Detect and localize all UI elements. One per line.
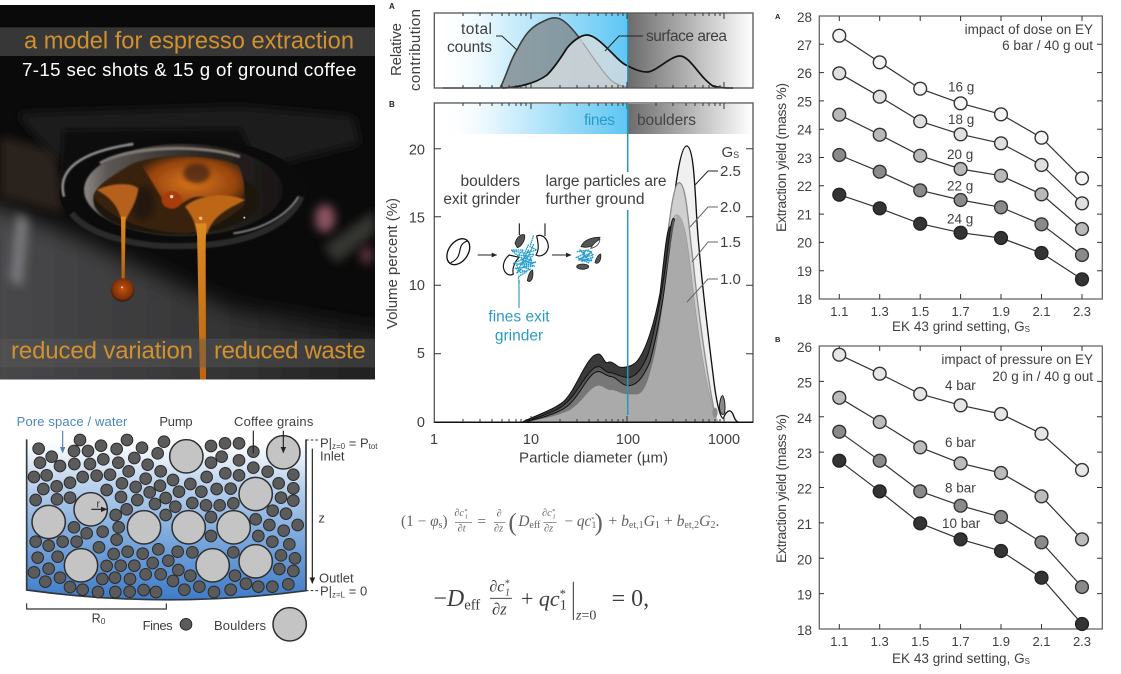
equation: mass balance: G [699,513,710,530]
inset: grinding schematic [442,223,601,308]
water-filled basket [27,439,306,600]
heading: a model for espresso extraction: a model for espresso extraction [24,29,354,55]
equation: mass balance: et,2 [684,520,699,531]
equation: mass balance: ∂z [494,523,503,534]
y axis labels: 20 [797,236,812,250]
curve leaders [687,171,718,302]
y axis labels: 22 [797,482,812,496]
label: outlet: Outlet [319,570,354,585]
y axis labels: 21 [797,208,812,222]
x axis labels [830,304,1091,319]
y axis labels: 21 [797,517,812,532]
equation: mass balance [401,508,719,537]
fines/boulders divider A [627,13,629,88]
y axis labels [797,10,812,307]
label: inlet pressure: = P [345,435,369,450]
curve labels [720,163,741,288]
band: fines to boulders: boulders [637,112,696,129]
series: 6 bar: 6 bar [945,435,976,450]
annotation: 20 g in / 40 g out [992,369,1093,384]
axis title: relative contribution: contribution [407,9,424,91]
x axis labels: 1.3 [871,304,889,319]
equation: mass balance: 2 [710,520,715,531]
x axis labels: 2.3 [1073,304,1091,319]
label: outlet pressure: = 0 [345,584,367,599]
icon: whole coffee bean [442,234,474,269]
series: 8 bar: 8 bar [945,481,976,496]
equation: mass balance: ∂c [454,508,464,519]
annotation [965,22,1093,53]
equation: mass balance: ∂ [497,509,502,520]
series: 22 g [833,149,1088,261]
equation: mass balance: 1 [655,520,660,531]
series: 4 bar [833,348,1088,476]
series: 6 bar [833,391,1088,546]
y axis labels [409,143,425,431]
panel letter B: B [389,100,395,109]
equation: mass balance: ( [508,509,517,537]
equation: inlet boundary condition: 1 [505,587,510,598]
x axis labels: 1.7 [952,634,970,649]
series: 16 g [833,29,1088,185]
y axis labels: 18 [797,292,812,307]
equation: mass balance: + b [608,513,629,530]
equation: mass balance: s [439,520,443,531]
y axis labels: 27 [797,38,812,53]
label: coffee grains: Coffee grains [234,414,314,429]
annotation: large particles further ground: large particles are [546,173,666,190]
y axis labels: 23 [797,151,812,166]
annotation: boulders exit grinder: exit grinder [443,191,520,208]
equation: mass balance: ) [594,509,603,537]
y axis labels: 20 [409,143,425,159]
series: 8 bar [833,425,1088,593]
legend: boulders [214,608,306,641]
equation: mass balance: 1 [592,521,597,531]
panel letter A: A [389,2,395,11]
x axis labels: 2.3 [1073,634,1091,649]
chart: relative contribution (panel A, middle) [388,2,753,91]
y axis title: Extraction yield (mass %) [773,414,789,563]
axis title: particle diameter: Particle diameter (µm) [519,450,668,467]
legend: fines: Fines [143,618,173,633]
axis title: relative contribution: Relative [388,23,405,76]
leader: total counts [496,36,517,50]
curve: total counts [443,18,627,88]
equation: inlet boundary condition: ∂z [492,599,507,618]
label: total counts: counts [447,39,492,56]
x axis labels: 1.9 [992,304,1010,319]
ticks [819,16,1102,299]
label: inlet pressure: tot [369,442,378,451]
x axis labels [430,432,740,448]
equation: inlet boundary condition: ∂c [489,579,504,596]
panel: coffee puck diagram [17,414,378,641]
equation: mass balance: ) [442,513,448,530]
x axis labels: 2.1 [1032,304,1051,319]
y axis title: Extraction yield (mass %) [773,83,789,232]
x axis labels: 1.5 [911,304,929,319]
subheading: shots and dose: 7-15 sec shots & 15 g of ground coffee [22,59,356,80]
icon: bean fragments and boulders [503,235,601,282]
panel: espresso photo with title overlays [0,5,375,380]
distribution curves [522,146,740,422]
equation: inlet boundary condition: 1 [560,597,567,613]
label: pore space / water: Pore space / water [17,414,128,429]
series: 24 g: 24 g [947,211,973,226]
y axis labels: 15 [409,211,425,227]
y axis labels: 28 [797,10,812,25]
boulder particles [32,436,300,582]
chart: impact of pressure on extraction yield [773,335,1102,666]
x axis labels: 10 [523,432,539,448]
label: surface area: surface area [646,28,727,45]
equation: mass balance: eff [529,520,541,531]
x axis labels: 1.7 [952,304,970,319]
y axis labels: 19 [797,264,812,279]
y axis labels: 25 [797,375,812,390]
x axis title: EK 43 grind setting, G [892,651,1025,666]
equation: inlet boundary condition: z=0 [575,608,596,623]
equation: mass balance: . [715,513,719,530]
equation: inlet boundary condition: * [560,587,566,601]
x axis labels: 1.3 [871,634,889,649]
equation: inlet boundary condition: −D [433,586,464,612]
equation: mass balance: G [644,513,655,530]
x axis title: S [1025,325,1030,334]
label: r: r [96,498,100,510]
x axis labels: 1.1 [830,304,848,319]
x axis title: EK 43 grind setting, G [892,319,1025,334]
panel letter: A [775,12,781,21]
curve labels: 2.0 [720,199,741,216]
fine particles [28,434,303,598]
label: z: z [318,510,325,525]
series: 4 bar: 4 bar [945,378,976,393]
annotation: large particles further ground: further ground [546,191,644,208]
curve labels: 1.5 [720,234,741,251]
label: pump: Pump [159,414,193,429]
annotation: large particles further ground [546,173,666,208]
x axis labels [830,634,1091,649]
band: fines to boulders: fines [584,112,615,129]
x axis labels: 1 [430,432,438,448]
legend: fines [143,618,192,633]
series: 16 g: 16 g [948,80,974,95]
arrow: pore space [61,431,64,453]
equation: mass balance: et,1 [629,520,644,531]
equation: inlet boundary condition: eff [464,597,480,613]
label: outlet pressure: z=L [332,590,346,599]
y axis labels [797,340,812,638]
y axis labels: 24 [797,122,812,138]
y axis labels: 24 [797,411,812,426]
y axis labels: 18 [797,623,812,638]
equation: mass balance: ∂c [542,508,552,519]
y axis labels: 26 [797,66,812,81]
curve labels: 2.5 [720,163,741,180]
divider: fines/boulders at 100 micrometres [627,103,629,415]
equation: mass balance: b [677,513,685,530]
frame [819,16,1102,299]
curve labels: 1.0 [720,271,741,288]
equation: mass balance: ∂t [458,523,467,534]
label: R0: R [92,612,101,626]
frame [819,346,1102,629]
y axis labels: 20 [797,552,812,567]
equation: mass balance: ∂z [544,523,553,534]
callout: reduced waste: reduced waste [214,337,366,364]
legend title: Gs: S [733,150,739,160]
equation: mass balance: = [477,514,486,531]
label: total counts [447,21,492,56]
series: 24 g [833,188,1088,286]
arrow: z axis [311,449,314,583]
x axis labels: 100 [616,432,640,448]
frame A [434,13,753,88]
ticks [819,346,1102,629]
y axis labels: 23 [797,446,812,461]
axis baseline and frame B [434,103,753,422]
chart: impact of dose on extraction yield [773,10,1102,334]
series: 20 g [833,108,1088,235]
x axis labels: 1000 [708,432,740,448]
callout: reduced variation: reduced variation [11,337,193,364]
y axis labels: 10 [409,278,425,294]
annotation: impact of dose on EY [965,22,1093,37]
x axis labels: 1.5 [911,634,929,649]
icon: fines cloud [512,236,593,284]
equation: mass balance: * [552,508,556,515]
series: 10 bar [833,454,1088,630]
label: inlet: Inlet [320,449,345,464]
axis title: relative contribution [388,9,424,91]
ticks A [463,13,724,88]
label: inlet pressure: z=0 [332,442,346,451]
equation: mass balance: 1 [465,513,468,520]
x axis title: S [1025,657,1030,666]
curve: surface area [502,35,628,88]
arrows: coffee grains [253,431,283,453]
legend: boulders: Boulders [214,618,266,633]
x axis labels: 2.1 [1032,634,1051,649]
series: 18 g: 18 g [948,112,974,127]
arrow: bean to grinder [478,253,497,256]
label: R0: 0 [101,616,106,626]
annotation: boulders exit grinder [443,173,520,208]
y axis labels: 5 [417,346,425,362]
legend title: Gs: G [722,144,733,161]
pressure markers [306,440,319,591]
equation: inlet boundary condition: + qc [521,586,560,611]
annotation: impact of pressure on EY [941,352,1093,367]
equation: mass balance: * [464,508,468,515]
equation: mass balance: * [591,516,595,523]
label: total counts: total [461,21,492,38]
equation: mass balance: 1 [552,513,556,520]
band: fines to boulders [440,104,752,134]
x axis labels: 1.1 [830,634,848,649]
y axis labels: 22 [797,179,812,194]
equation: mass balance: − qc [564,513,591,530]
annotation: boulders exit grinder: boulders [461,173,520,190]
series: 22 g: 22 g [947,179,973,194]
chart: particle size distribution (panel B, middle) [384,100,753,467]
equation: mass balance: (1 − φ [401,513,439,530]
series: 10 bar: 10 bar [942,516,981,531]
annotation: fines exit grinder [488,309,550,345]
bracket: R0 [27,603,166,609]
label: outlet pressure: P| [320,584,332,599]
equation: inlet boundary condition [433,579,649,623]
annotation: fines exit grinder: grinder [495,328,543,345]
panel letter: B [775,335,781,344]
series: 20 g: 20 g [947,147,973,162]
equation: inlet boundary condition: = 0, [612,586,649,612]
annotation: fines exit grinder: fines exit [488,309,550,326]
arrow: grinder to output [552,253,571,256]
equation: inlet boundary condition: * [504,579,509,590]
y axis labels: 0 [417,415,425,431]
axis title: volume percent: Volume percent (%) [384,198,401,329]
equation: mass balance: + [660,513,677,530]
annotation: 6 bar / 40 g out [1002,38,1093,53]
label: inlet pressure: P| [320,435,332,450]
y axis labels: 26 [797,340,812,355]
annotation [941,352,1093,384]
x axis labels: 1.9 [992,634,1010,649]
ticks B [434,103,753,422]
y axis labels: 25 [797,94,812,110]
equation: mass balance: D [518,513,529,530]
arrow: radius r [91,508,107,511]
leader: surface area [605,36,643,51]
series: 18 g [833,67,1088,210]
y axis labels: 19 [797,588,812,603]
